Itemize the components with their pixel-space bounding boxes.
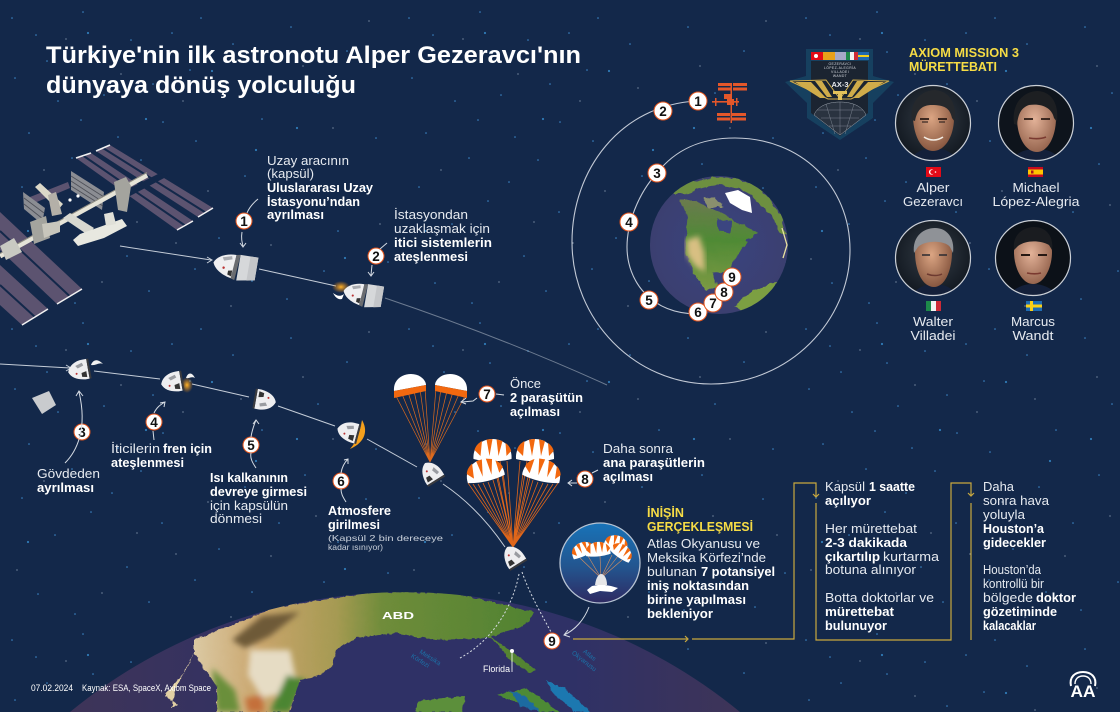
- name: Walter Villadei: Villadei: [910, 329, 956, 343]
- capsule 2 with thruster flame: [332, 279, 385, 311]
- step 4 text: fren için: [163, 442, 212, 456]
- orbit number markers: 7: [709, 296, 717, 311]
- recovery text column: Kapsül: [825, 480, 865, 494]
- lower trajectory lines: [0, 364, 505, 547]
- landing description: bulunan: [647, 565, 697, 579]
- crew heading: MÜRETTEBATI: [909, 59, 997, 74]
- landing description: Atlas Okyanusu ve: [647, 537, 760, 551]
- step circles on trajectory: [74, 213, 593, 649]
- step 2 text: itici sistemlerin: [394, 236, 492, 250]
- recovery text column: çıkartılıp: [825, 550, 880, 564]
- title: [46, 42, 581, 99]
- flag: Italy: [926, 301, 941, 311]
- recovery text column: [825, 480, 939, 633]
- orbit number markers: 5: [645, 293, 653, 308]
- step 4 text: ateşlenmesi: [111, 456, 184, 470]
- Houston text column: Houston’a: [983, 522, 1045, 536]
- title: dünyaya dönüş yolculuğu: [46, 72, 356, 99]
- mission patch: WANDT: [833, 74, 847, 78]
- capsule 6 atmosphere entry: [335, 419, 365, 449]
- landing heading: GERÇEKLEŞMESİ: [647, 519, 753, 534]
- capsule under drogue chutes: [417, 458, 445, 487]
- label: Atlas Okyanusu: Atlas: [581, 648, 598, 663]
- orbit number markers: 8: [720, 285, 728, 300]
- name: Michael López-Alegria: Michael: [1012, 181, 1060, 195]
- orbit spiral path: [572, 101, 850, 384]
- orbit number markers: 9: [728, 270, 736, 285]
- step 3 text: Gövdeden: [37, 467, 100, 481]
- crew heading: [909, 46, 1019, 74]
- flag: Sweden: [1026, 301, 1042, 311]
- step 6 text: girilmesi: [328, 518, 380, 532]
- capsule 1: [211, 249, 259, 284]
- gold flow arrows: [573, 483, 974, 642]
- step circles on trajectory: 9: [548, 634, 556, 649]
- landing description: Meksika Körfezi’nde: [647, 551, 766, 565]
- portrait: Alper Gezeravcı: [896, 86, 970, 162]
- Houston text column: doktor: [1036, 591, 1076, 605]
- name: Michael López-Alegria: [992, 181, 1080, 209]
- space station illustration: [0, 145, 213, 325]
- recovery text column: Her mürettebat: [825, 522, 918, 536]
- orbit number markers: 4: [625, 215, 633, 230]
- flag: Spain: [1028, 167, 1043, 177]
- Florida marker: Florida: [483, 664, 510, 674]
- step 1 text: Uluslararası Uzay: [267, 181, 373, 195]
- orbit number markers: 2: [659, 104, 667, 119]
- capsule 5 rotating: [252, 389, 278, 412]
- recovery text column: açılıyor: [825, 494, 871, 508]
- step circles on trajectory: 5: [247, 438, 255, 453]
- name: Alper Gezeravcı: Alper: [916, 181, 950, 195]
- step 1 text: Uzay aracının: [267, 154, 349, 168]
- name: Marcus Wandt: Marcus: [1011, 315, 1055, 329]
- Houston text column: yoluyla: [983, 508, 1025, 522]
- mission patch: VILLADEI: [831, 70, 849, 74]
- name: Marcus Wandt: Wandt: [1012, 329, 1054, 343]
- step 1 text: [267, 154, 373, 222]
- mission patch: GEZERAVCI: [829, 62, 851, 66]
- main parachutes: [463, 439, 564, 485]
- source line: 07.02.2024: [31, 683, 73, 693]
- Houston text column: bölgede: [983, 591, 1033, 605]
- Houston text column: sonra hava: [983, 494, 1049, 508]
- orbit number markers: 3: [653, 166, 661, 181]
- recovery text column: botuna alınıyor: [825, 563, 916, 577]
- step 7 text: 2 paraşütün: [510, 391, 583, 405]
- step 6 text: kadar ısınıyor): [328, 542, 383, 552]
- capsule descending: [499, 542, 527, 571]
- icon: AA logo: [1070, 672, 1096, 701]
- step circles on trajectory: 4: [150, 415, 158, 430]
- step 1 text: (kapsül): [267, 167, 314, 181]
- step circles on trajectory: 6: [337, 474, 345, 489]
- step 7 text: açılması: [510, 405, 560, 419]
- earth horizon with North America: [70, 592, 740, 712]
- icon: orange space station: [712, 83, 747, 123]
- crew heading: AXIOM MISSION 3: [909, 46, 1019, 60]
- name: Marcus Wandt: [1011, 315, 1055, 343]
- capsule 4 braking: [159, 371, 195, 394]
- label: Meksika Körfezi: Körfezi: [409, 653, 430, 670]
- name: Walter Villadei: [910, 315, 956, 343]
- Houston text column: Houston’da: [983, 563, 1041, 577]
- Houston text column: Daha: [983, 480, 1014, 494]
- icon: AA logo: AA: [1070, 682, 1096, 701]
- step 6 text: (Kapsül 2 bin dereceye: [328, 533, 443, 543]
- label: Meksika Körfezi: Meksika: [418, 649, 442, 668]
- callout arrows: [65, 199, 598, 637]
- Houston text column: [983, 480, 1076, 633]
- step 1 text: İstasyonu’ndan: [267, 194, 360, 209]
- source line: [31, 683, 211, 693]
- title: Türkiye'nin ilk astronotu Alper Gezeravcı'nın: [46, 42, 581, 69]
- Houston text column: kontrollü bir: [983, 577, 1044, 591]
- mission patch: [785, 49, 894, 140]
- portrait: Marcus Wandt: [996, 220, 1070, 297]
- splashdown circular image: [560, 523, 640, 603]
- step 5 text: devreye girmesi: [210, 485, 307, 499]
- recovery text column: bulunuyor: [825, 619, 887, 633]
- two drogue parachutes: [394, 374, 467, 462]
- step 4 text: [111, 442, 212, 470]
- name: Michael López-Alegria: López-Alegria: [992, 195, 1080, 209]
- orbit number markers: 6: [694, 305, 702, 320]
- Houston text column: gözetiminde: [983, 605, 1057, 619]
- label: ABD: ABD: [382, 610, 415, 622]
- step 8 text: [603, 442, 705, 484]
- landing heading: İNİŞİN: [647, 505, 684, 520]
- step 2 text: ateşlenmesi: [394, 250, 468, 264]
- step 5 text: Isı kalkanının: [210, 471, 288, 485]
- landing description: iniş noktasından: [647, 579, 749, 593]
- step circles on trajectory: 2: [372, 249, 380, 264]
- name: Alper Gezeravcı: Gezeravcı: [903, 195, 963, 209]
- step 3 text: [37, 467, 100, 495]
- step circles on trajectory: 8: [581, 472, 589, 487]
- main parachute lines: [468, 461, 558, 547]
- globe: [650, 176, 788, 314]
- portrait: Michael López-Alegria: [998, 86, 1074, 162]
- step 3 text: ayrılması: [37, 481, 94, 495]
- mission patch: AX-3: [831, 80, 849, 89]
- landing description: [647, 537, 775, 621]
- step 1 text: ayrılması: [267, 208, 324, 222]
- step 7 text: [510, 377, 583, 419]
- step 5 text: dönmesi: [210, 512, 262, 526]
- Florida marker: [483, 649, 514, 674]
- recovery text column: kurtarma: [883, 550, 939, 564]
- source line: Kaynak: ESA, SpaceX, Axiom Space: [82, 683, 211, 693]
- step 2 text: uzaklaşmak için: [394, 222, 490, 236]
- capsule 3 separated: [32, 359, 103, 414]
- landing description: bekleniyor: [647, 607, 713, 621]
- dashed landing paths: [460, 572, 551, 658]
- Houston text column: gidecekler: [983, 536, 1046, 550]
- step 8 text: açılması: [603, 470, 653, 484]
- landing description: 7 potansiyel: [701, 565, 775, 579]
- flag: Turkey: [926, 167, 941, 177]
- orbit number markers: 1: [694, 94, 702, 109]
- step 6 text: Atmosfere: [328, 504, 391, 518]
- step 4 text: İticilerin: [111, 442, 160, 456]
- recovery text column: 2-3 dakikada: [825, 536, 908, 550]
- mission patch: LÓPEZ-ALEGRÍA: [824, 65, 856, 70]
- name: Alper Gezeravcı: [903, 181, 963, 209]
- step circles on trajectory: 1: [240, 214, 248, 229]
- step 5 text: için kapsülün: [210, 499, 288, 513]
- label: Atlas Okyanusu: Okyanusu: [570, 650, 598, 673]
- recovery text column: mürettebat: [825, 605, 895, 619]
- step 5 text: [210, 471, 307, 526]
- landing description: birine yapılması: [647, 593, 746, 607]
- step circles on trajectory: 7: [483, 387, 491, 402]
- name: Walter Villadei: Walter: [913, 315, 953, 329]
- landing heading: [647, 505, 753, 534]
- upper trajectory lines: [120, 246, 607, 385]
- step 7 text: Önce: [510, 377, 541, 391]
- portrait: Walter Villadei: [896, 220, 970, 297]
- step 6 text: [328, 504, 443, 552]
- step 2 text: İstasyondan: [394, 208, 468, 222]
- recovery text column: 1 saatte: [869, 480, 915, 494]
- step 8 text: ana paraşütlerin: [603, 456, 705, 470]
- step 8 text: Daha sonra: [603, 442, 673, 456]
- recovery text column: Botta doktorlar ve: [825, 591, 934, 605]
- orbit number markers: [620, 92, 741, 321]
- step circles on trajectory: 3: [78, 425, 86, 440]
- Houston text column: kalacaklar: [983, 619, 1036, 633]
- step 2 text: [394, 208, 492, 264]
